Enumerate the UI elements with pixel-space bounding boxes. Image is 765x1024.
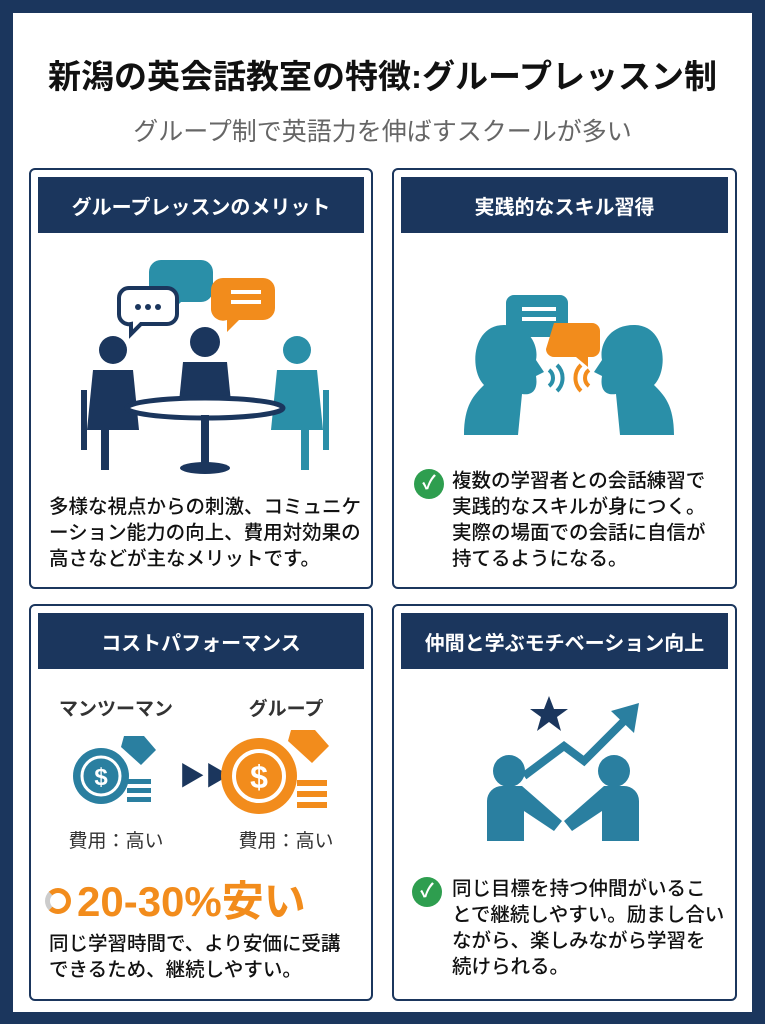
panel: practical skills	[392, 168, 737, 589]
icon: coin teal: $	[94, 764, 108, 791]
heading: cost	[38, 613, 364, 669]
text: practical: 複数の学習者との会話練習で	[452, 470, 705, 492]
arrow: ▶▶	[179, 761, 231, 791]
subtitle: グループ制で英語力を伸ばすスクールが多い	[133, 118, 632, 146]
heading: motivation: 仲間と学ぶモチベーション向上	[425, 632, 704, 654]
heading: motivation	[401, 613, 728, 669]
heading: practical: 実践的なスキル習得	[474, 196, 654, 218]
title: 新潟の英会話教室の特徴:グループレッスン制	[48, 58, 717, 95]
heading: merits	[38, 177, 364, 233]
icon: coin teal	[73, 736, 156, 804]
panel: cost performance	[29, 604, 373, 1001]
text: practical	[452, 470, 706, 570]
label: man-to-man: マンツーマン	[59, 699, 173, 720]
text: cost: 同じ学習時間で、より安価に受講	[49, 933, 340, 955]
text: motivation: ながら、楽しみながら学習を	[452, 930, 706, 952]
check icon	[412, 877, 442, 907]
icon: meeting	[81, 260, 329, 474]
panel: group lesson merits	[29, 168, 373, 589]
text: merits: 多様な視点からの刺激、コミュニケ	[49, 496, 361, 518]
icon: conversation heads	[464, 295, 674, 435]
heading: merits: グループレッスンのメリット	[72, 196, 330, 218]
icon: coin orange: $	[250, 759, 268, 795]
label: cost high 2: 費用：高い	[238, 831, 334, 852]
text: practical: 持てるようになる。	[452, 548, 628, 570]
text: practical: 実践的なスキルが身につく。	[452, 496, 706, 518]
heading: cost: コストパフォーマンス	[101, 632, 301, 654]
icon: handshake growth	[487, 696, 639, 841]
check icon: ✓	[420, 881, 434, 902]
text: merits: ーション能力の向上、費用対効果の	[49, 522, 361, 544]
text: cost: できるため、継続しやすい。	[49, 959, 302, 981]
text: merits	[49, 496, 361, 570]
panel: motivation	[392, 604, 737, 1001]
text: motivation	[452, 878, 724, 978]
text: motivation: 続けられる。	[452, 956, 569, 978]
text: motivation: とで継続しやすい。励まし合い	[452, 904, 724, 926]
check icon	[414, 469, 444, 499]
heading: practical	[401, 177, 728, 233]
text: cost	[49, 933, 340, 981]
label: group: グループ	[249, 699, 323, 720]
label: cost high 1: 費用：高い	[68, 831, 164, 852]
check icon: ✓	[422, 473, 436, 494]
text: practical: 実際の場面での会話に自信が	[452, 522, 706, 544]
highlight: 20-30% cheaper: 20-30%安い	[77, 878, 306, 925]
text: motivation: 同じ目標を持つ仲間がいるこ	[452, 878, 706, 900]
icon: coin orange	[221, 730, 329, 814]
text: merits: 高さなどが主なメリットです。	[49, 548, 320, 570]
